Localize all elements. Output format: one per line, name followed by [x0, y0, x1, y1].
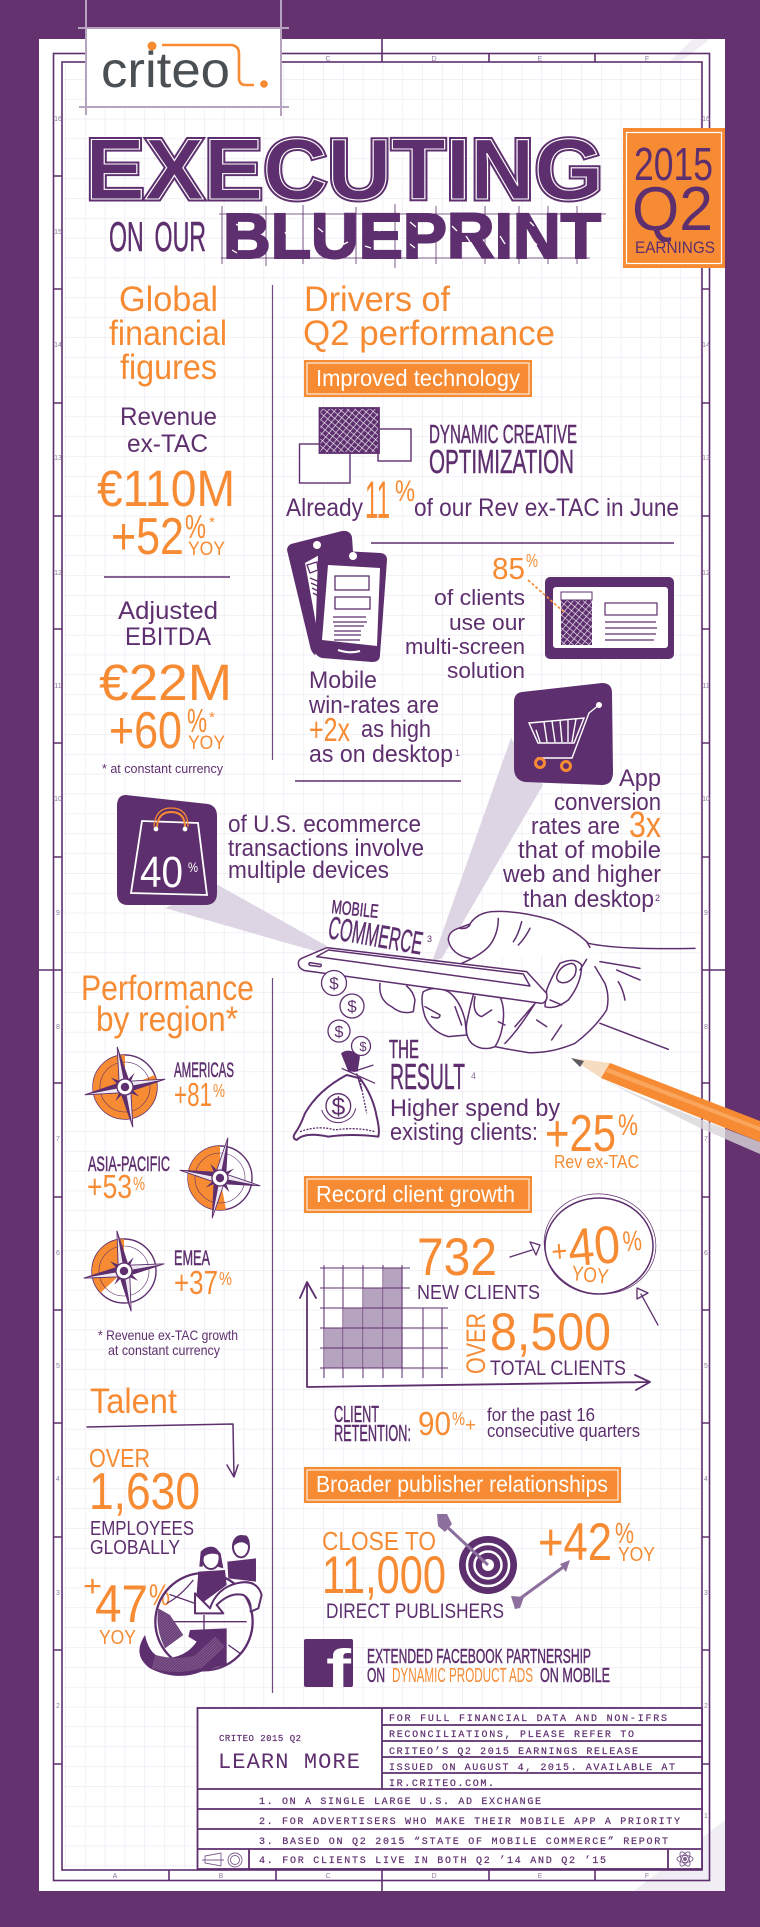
stat: adjusted EBITDA: Adjusted	[118, 597, 218, 625]
stat: revenue ex-TAC: *	[209, 514, 215, 531]
arrow: upward to +42%	[511, 1560, 570, 1609]
icon: facebook	[304, 1639, 353, 1699]
logo: criteo	[78, 0, 289, 116]
text: app conversion rates	[502, 765, 661, 913]
heading: performance by region: Performance	[81, 969, 254, 1008]
stat: client retention: RETENTION:	[334, 1420, 411, 1446]
blueprint paper sheet: D	[431, 56, 437, 63]
stat: Asia-Pacific: %	[133, 1174, 145, 1194]
text: app conversion rates: rates are	[531, 813, 620, 840]
title: Executing on our Blueprint: EXECUTING	[86, 122, 604, 218]
stat: mobile win-rates: 1	[455, 748, 460, 758]
stat: employees: +	[83, 1570, 102, 1603]
stat: over 8,500 total clients: OVER	[461, 1313, 491, 1374]
stat: mobile win-rates: win-rates are	[308, 692, 439, 719]
column divider lower	[272, 978, 274, 1693]
stat: over 8,500 total clients: 8,500	[490, 1303, 611, 1362]
stat: employees: 1,630	[89, 1463, 200, 1521]
label: mobile commerce	[326, 897, 432, 961]
stat: client retention	[334, 1401, 640, 1446]
title: Executing on our Blueprint	[86, 122, 606, 272]
stat: employees	[83, 1443, 200, 1649]
callout: +40% YOY circle	[538, 1187, 662, 1301]
arrow: to +40% from below	[637, 1288, 658, 1325]
stat: 732 new clients: 732	[417, 1228, 497, 1287]
text: the result: THE	[389, 1034, 419, 1064]
stat: close to 11,000: CLOSE TO	[322, 1526, 436, 1556]
text: U.S. ecommerce transactions: transactions involve	[228, 835, 424, 862]
stat: 732 new clients	[417, 1228, 540, 1304]
panel: talent	[83, 1382, 262, 1676]
badge: 2015 Q2 earnings: EARNINGS	[635, 238, 715, 257]
heading: global financial figures: figures	[120, 348, 217, 387]
text: extended facebook partnership: EXTENDED FACEBOOK PARTNERSHIP	[367, 1646, 591, 1668]
blueprint paper sheet: 5	[704, 1363, 708, 1370]
stat: EMEA: %	[219, 1269, 232, 1289]
banner: broader publisher relationships	[304, 1467, 621, 1503]
blueprint paper sheet: D	[431, 1873, 437, 1880]
stat: 85% of clients multi-screen: of clients	[434, 585, 525, 610]
text: app conversion rates: that of mobile	[518, 837, 661, 864]
text: criteo 2015 Q2 learn more: LEARN MORE	[218, 1750, 360, 1775]
blueprint paper sheet: 12	[702, 570, 710, 577]
blueprint paper sheet: 9	[704, 910, 708, 917]
stat: Asia-Pacific	[87, 1153, 170, 1205]
stat: over 8,500 total clients	[461, 1303, 626, 1380]
icon: falling coins: $	[335, 1024, 344, 1041]
stat: employees: YOY	[99, 1627, 136, 1649]
icon: shopping cart tile	[514, 683, 613, 785]
stat: revenue ex-TAC: +52	[111, 508, 184, 566]
stat: EMEA: EMEA	[174, 1247, 210, 1270]
badge: 2015 Q2 earnings: Q2	[632, 175, 713, 244]
stat: 732 new clients: NEW CLIENTS	[417, 1282, 540, 1304]
illustration: hand holding phone	[298, 911, 695, 1053]
icon: falling coins	[322, 970, 370, 1056]
stat: client retention: CLIENT	[334, 1401, 379, 1427]
text: already 11% of Rev ex-TAC: of our Rev ex-TAC in June	[414, 494, 679, 522]
icon: money bag: $	[331, 1094, 345, 1121]
blueprint paper sheet: 11	[702, 683, 710, 690]
text: already 11% of Rev ex-TAC: Already	[286, 494, 363, 522]
text: dynamic creative optimization: DYNAMIC CREATIVE	[429, 419, 577, 449]
footnote: revenue growth: * Revenue ex-TAC growth	[98, 1327, 238, 1343]
stat: mobile win-rates: as on desktop	[309, 741, 453, 768]
blueprint paper sheet: 3	[56, 1590, 60, 1597]
blueprint paper sheet: 16	[702, 116, 710, 123]
icon: orange pencil	[571, 1058, 760, 1154]
stat: adjusted EBITDA: *	[209, 709, 215, 726]
blueprint paper sheet: 3	[704, 1590, 708, 1597]
icon: shopping bag 40% tile	[117, 795, 217, 905]
text: U.S. ecommerce transactions: multiple devices	[228, 857, 389, 884]
icon: target with arrow	[437, 1514, 517, 1594]
compass: Asia-Pacific 53%	[172, 1130, 268, 1226]
blueprint paper sheet: 4	[56, 1476, 60, 1483]
label: mobile commerce: COMMERCE	[326, 909, 426, 961]
heading: global financial figures: financial	[109, 314, 227, 353]
banner: record client growth: Record client growth	[316, 1181, 515, 1207]
heading: performance by region	[81, 969, 254, 1039]
blueprint paper sheet: F	[645, 56, 649, 63]
stat: EMEA: +37	[174, 1264, 218, 1301]
stat: client retention: consecutive quarters	[487, 1421, 640, 1441]
blueprint paper sheet: E	[538, 56, 543, 63]
stat: 85% of clients multi-screen: multi-screen	[405, 634, 525, 659]
panel: record client growth	[300, 1176, 662, 1446]
title: Executing on our Blueprint: BLUEPRINT	[223, 200, 601, 272]
panel: global financial figures	[97, 280, 235, 776]
blueprint paper sheet: C	[325, 56, 331, 63]
stat: +42% YOY: +42	[538, 1513, 612, 1572]
stat: EMEA	[174, 1247, 232, 1301]
blueprint paper sheet: E	[538, 1873, 543, 1880]
text: the result: Rev ex-TAC	[554, 1152, 639, 1172]
stat: employees: 47	[95, 1575, 148, 1634]
banner: broader publisher relationships: Broader publisher relationships	[316, 1471, 608, 1497]
stat: mobile win-rates: as high	[361, 716, 431, 743]
text: numbered footnotes: 2. FOR ADVERTISERS WHO MAKE THEIR MOBILE APP A PRIORITY	[259, 1817, 680, 1828]
text: app conversion rates: 3x	[629, 804, 661, 845]
panel: drivers of Q2 performance	[286, 280, 679, 781]
text: dynamic creative optimization: OPTIMIZATION	[429, 443, 574, 480]
callout: +40% YOY circle: 40	[566, 1215, 623, 1278]
panel: performance by region	[77, 969, 268, 1358]
text: the result: %	[618, 1109, 638, 1142]
stat: adjusted EBITDA	[99, 597, 232, 776]
icon: falling coins: $	[359, 1039, 367, 1054]
label: mobile commerce: MOBILE	[330, 897, 379, 923]
text: U.S. ecommerce transactions: of U.S. ecommerce	[228, 811, 421, 838]
text: full financial data note: IR.CRITEO.COM.	[389, 1779, 494, 1790]
blueprint paper sheet: 10	[54, 796, 62, 803]
blueprint paper sheet: 11	[54, 683, 62, 690]
text: full financial data note: FOR FULL FINANCIAL DATA AND NON-IFRS	[389, 1714, 667, 1725]
icon: falling coins: $	[329, 974, 339, 993]
icon: mobile phones	[287, 531, 387, 662]
stat: adjusted EBITDA: %	[187, 702, 207, 739]
stat: revenue ex-TAC: %	[185, 508, 206, 545]
heading: global financial figures	[109, 280, 227, 387]
blueprint paper sheet: 7	[56, 1136, 60, 1143]
text: numbered footnotes: 1. ON A SINGLE LARGE U.S. AD EXCHANGE	[259, 1797, 541, 1808]
label: mobile commerce: 3	[427, 934, 432, 944]
stat: 85% of clients multi-screen: %	[526, 551, 538, 571]
text: the result: RESULT	[390, 1056, 465, 1097]
stat: 85% of clients multi-screen: use our	[449, 610, 525, 635]
heading: drivers of Q2 performance	[303, 280, 555, 353]
banner: improved technology: Improved technology	[316, 365, 520, 391]
icon: shopping bag 40% tile: %	[188, 859, 198, 875]
callout: +40% YOY circle: YOY	[570, 1262, 610, 1289]
text: app conversion rates: conversion	[554, 789, 661, 816]
column divider upper	[272, 285, 274, 760]
text: the result: existing clients:	[390, 1119, 538, 1146]
callout: +40% YOY circle: +	[550, 1235, 569, 1269]
stat: revenue ex-TAC: ex-TAC	[127, 430, 208, 458]
stat: mobile win-rates	[308, 667, 460, 768]
light beam from bag icon	[165, 885, 327, 952]
stat: client retention: for the past 16	[487, 1405, 595, 1425]
callout: +40% YOY circle: %	[622, 1225, 643, 1259]
text: the result: Higher spend by	[390, 1095, 560, 1122]
heading: performance by region: by region*	[96, 1000, 238, 1039]
blueprint paper sheet: 14	[702, 342, 710, 349]
blueprint paper sheet: 15	[54, 229, 62, 236]
text: already 11% of Rev ex-TAC: %	[395, 475, 415, 508]
stat: Americas	[174, 1059, 234, 1113]
arrow: talent bracket	[87, 1424, 238, 1477]
badge: 2015 Q2 earnings	[623, 128, 725, 268]
icon: shopping bag 40% tile: 40	[140, 848, 183, 897]
stat: 85% of clients multi-screen: 85	[492, 551, 525, 586]
blueprint paper sheet: 7	[704, 1136, 708, 1143]
text: the result	[389, 1034, 639, 1172]
stat: client retention: 90	[418, 1405, 451, 1442]
text: the result: +25	[545, 1105, 616, 1163]
stat: employees: EMPLOYEES	[90, 1518, 194, 1540]
blueprint paper sheet: 12	[54, 570, 62, 577]
blueprint paper sheet: 10	[702, 796, 710, 803]
stat: revenue ex-TAC: YOY	[188, 539, 225, 560]
title: Executing on our Blueprint: EXECUTING	[86, 122, 604, 218]
stat: Americas: +81	[174, 1076, 212, 1113]
compass: Americas 81%	[77, 1039, 173, 1135]
blueprint paper sheet: 13	[702, 455, 710, 462]
blueprint paper sheet: 8	[56, 1024, 60, 1031]
heading: global financial figures: Global	[119, 280, 218, 319]
text: the result: 4	[471, 1071, 476, 1081]
arrow: to +40%	[510, 1242, 540, 1257]
blueprint paper sheet: 4	[704, 1476, 708, 1483]
stat: Asia-Pacific: ASIA-PACIFIC	[88, 1153, 170, 1176]
blueprint paper sheet: 15	[702, 229, 710, 236]
blueprint paper sheet: 14	[54, 342, 62, 349]
text: criteo 2015 Q2 learn more	[218, 1734, 360, 1775]
text: app conversion rates: 2	[655, 893, 660, 903]
panel: broader publisher relationships	[304, 1467, 655, 1699]
blueprint paper sheet: 2	[704, 1703, 708, 1710]
text: dynamic creative optimization	[429, 419, 577, 480]
blueprint paper sheet: 5	[56, 1363, 60, 1370]
text: numbered footnotes: 4. FOR CLIENTS LIVE IN BOTH Q2 ’14 AND Q2 ’15	[259, 1855, 606, 1867]
stat: mobile win-rates: +2x	[309, 711, 350, 748]
footnote: revenue growth: at constant currency	[108, 1342, 220, 1358]
stat: close to 11,000: DIRECT PUBLISHERS	[326, 1600, 504, 1623]
blueprint paper sheet: 8	[704, 1024, 708, 1031]
logo: criteo: criteo	[101, 42, 230, 98]
stat: +42% YOY: YOY	[618, 1544, 655, 1566]
heading: drivers of Q2 performance: Q2 performance	[303, 314, 555, 353]
icon: people and globe with arrows	[139, 1535, 262, 1676]
blueprint paper sheet: 1	[704, 1813, 708, 1820]
stat: adjusted EBITDA: * at constant currency	[102, 761, 223, 776]
text: criteo 2015 Q2 learn more: CRITEO 2015 Q2	[219, 1734, 301, 1744]
text: U.S. ecommerce transactions	[228, 811, 424, 884]
stat: close to 11,000	[322, 1526, 504, 1623]
stat: adjusted EBITDA: €22M	[99, 654, 232, 711]
stat: adjusted EBITDA: +60	[109, 702, 182, 760]
text: numbered footnotes: 3. BASED ON Q2 2015 “STATE OF MOBILE COMMERCE” REPORT	[259, 1836, 668, 1848]
badge: 2015 Q2 earnings: 2015	[634, 138, 713, 190]
text: app conversion rates: web and higher	[502, 861, 661, 888]
icon: atom	[677, 1850, 693, 1868]
stat: client retention: +	[465, 1415, 476, 1435]
blueprint paper sheet: 16	[54, 116, 62, 123]
text: app conversion rates: than desktop	[523, 886, 654, 913]
heading: talent: Talent	[90, 1382, 177, 1421]
text: extended facebook partnership: ON	[367, 1665, 385, 1687]
icon: tablet	[528, 577, 674, 659]
stat: employees: GLOBALLY	[90, 1537, 180, 1559]
text: numbered footnotes	[259, 1797, 680, 1867]
stat: employees: OVER	[89, 1443, 150, 1473]
blueprint paper sheet: 6	[704, 1250, 708, 1257]
stat: adjusted EBITDA: EBITDA	[125, 623, 211, 651]
stat: over 8,500 total clients: TOTAL CLIENTS	[490, 1357, 626, 1380]
heading: drivers of Q2 performance: Drivers of	[304, 280, 450, 319]
title: Executing on our Blueprint: ON OUR	[109, 213, 206, 260]
banner: improved technology	[304, 360, 532, 397]
stat: Americas: AMERICAS	[174, 1059, 234, 1082]
icon: dynamic creative squares	[300, 408, 411, 483]
stat: client retention: %	[452, 1409, 465, 1429]
light beam from cart icon	[432, 738, 543, 962]
icon: falling coins: $	[347, 997, 357, 1016]
blueprint paper sheet: C	[325, 1873, 331, 1880]
blueprint paper sheet: 2	[56, 1703, 60, 1710]
text: app conversion rates: App	[619, 765, 661, 792]
blueprint paper sheet: 6	[56, 1250, 60, 1257]
stat: close to 11,000: 11,000	[322, 1546, 446, 1605]
stat: mobile win-rates: Mobile	[309, 667, 377, 694]
text: full financial data note: RECONCILIATIONS, PLEASE REFER TO	[389, 1730, 634, 1741]
text: extended facebook partnership: DYNAMIC PRODUCT ADS	[392, 1665, 533, 1687]
icon: projection symbol	[202, 1853, 242, 1867]
stat: adjusted EBITDA: YOY	[188, 733, 225, 754]
stat: 85% of clients multi-screen	[405, 551, 538, 683]
blueprint paper sheet: 13	[54, 455, 62, 462]
text: already 11% of Rev ex-TAC: 11	[365, 471, 390, 530]
chart: client growth bars on grid	[300, 1265, 650, 1390]
banner: record client growth	[304, 1176, 532, 1213]
stat: Americas: %	[213, 1081, 225, 1101]
stat: Asia-Pacific: +53	[87, 1168, 132, 1205]
text: full financial data note: ISSUED ON AUGUST 4, 2015. AVAILABLE AT	[389, 1763, 675, 1774]
title block: learn more and footnotes	[197, 1708, 702, 1869]
stat: revenue ex-TAC	[97, 403, 235, 566]
text: extended facebook partnership: ON MOBILE	[540, 1665, 610, 1687]
compass: EMEA 37%	[77, 1224, 171, 1318]
stat: employees: %	[149, 1579, 170, 1612]
text: full financial data note: CRITEO’S Q2 2015 EARNINGS RELEASE	[389, 1746, 638, 1758]
blueprint paper sheet: 9	[56, 910, 60, 917]
stat: 85% of clients multi-screen: solution	[447, 658, 525, 683]
blueprint paper sheet: F	[645, 1873, 649, 1880]
text: full financial data note	[389, 1714, 675, 1790]
text: already 11% of Rev ex-TAC	[286, 471, 679, 530]
text: extended facebook partnership	[367, 1646, 610, 1687]
stat: revenue ex-TAC: €110M	[97, 460, 235, 517]
stat: revenue ex-TAC: Revenue	[120, 403, 217, 431]
blueprint paper sheet: A	[113, 1873, 118, 1880]
blueprint paper sheet: B	[219, 1873, 224, 1880]
footnote: revenue growth	[98, 1327, 238, 1358]
icon: money bag	[294, 1051, 379, 1140]
icon: facebook: f	[326, 1639, 352, 1699]
stat: +42% YOY: %	[615, 1518, 634, 1550]
